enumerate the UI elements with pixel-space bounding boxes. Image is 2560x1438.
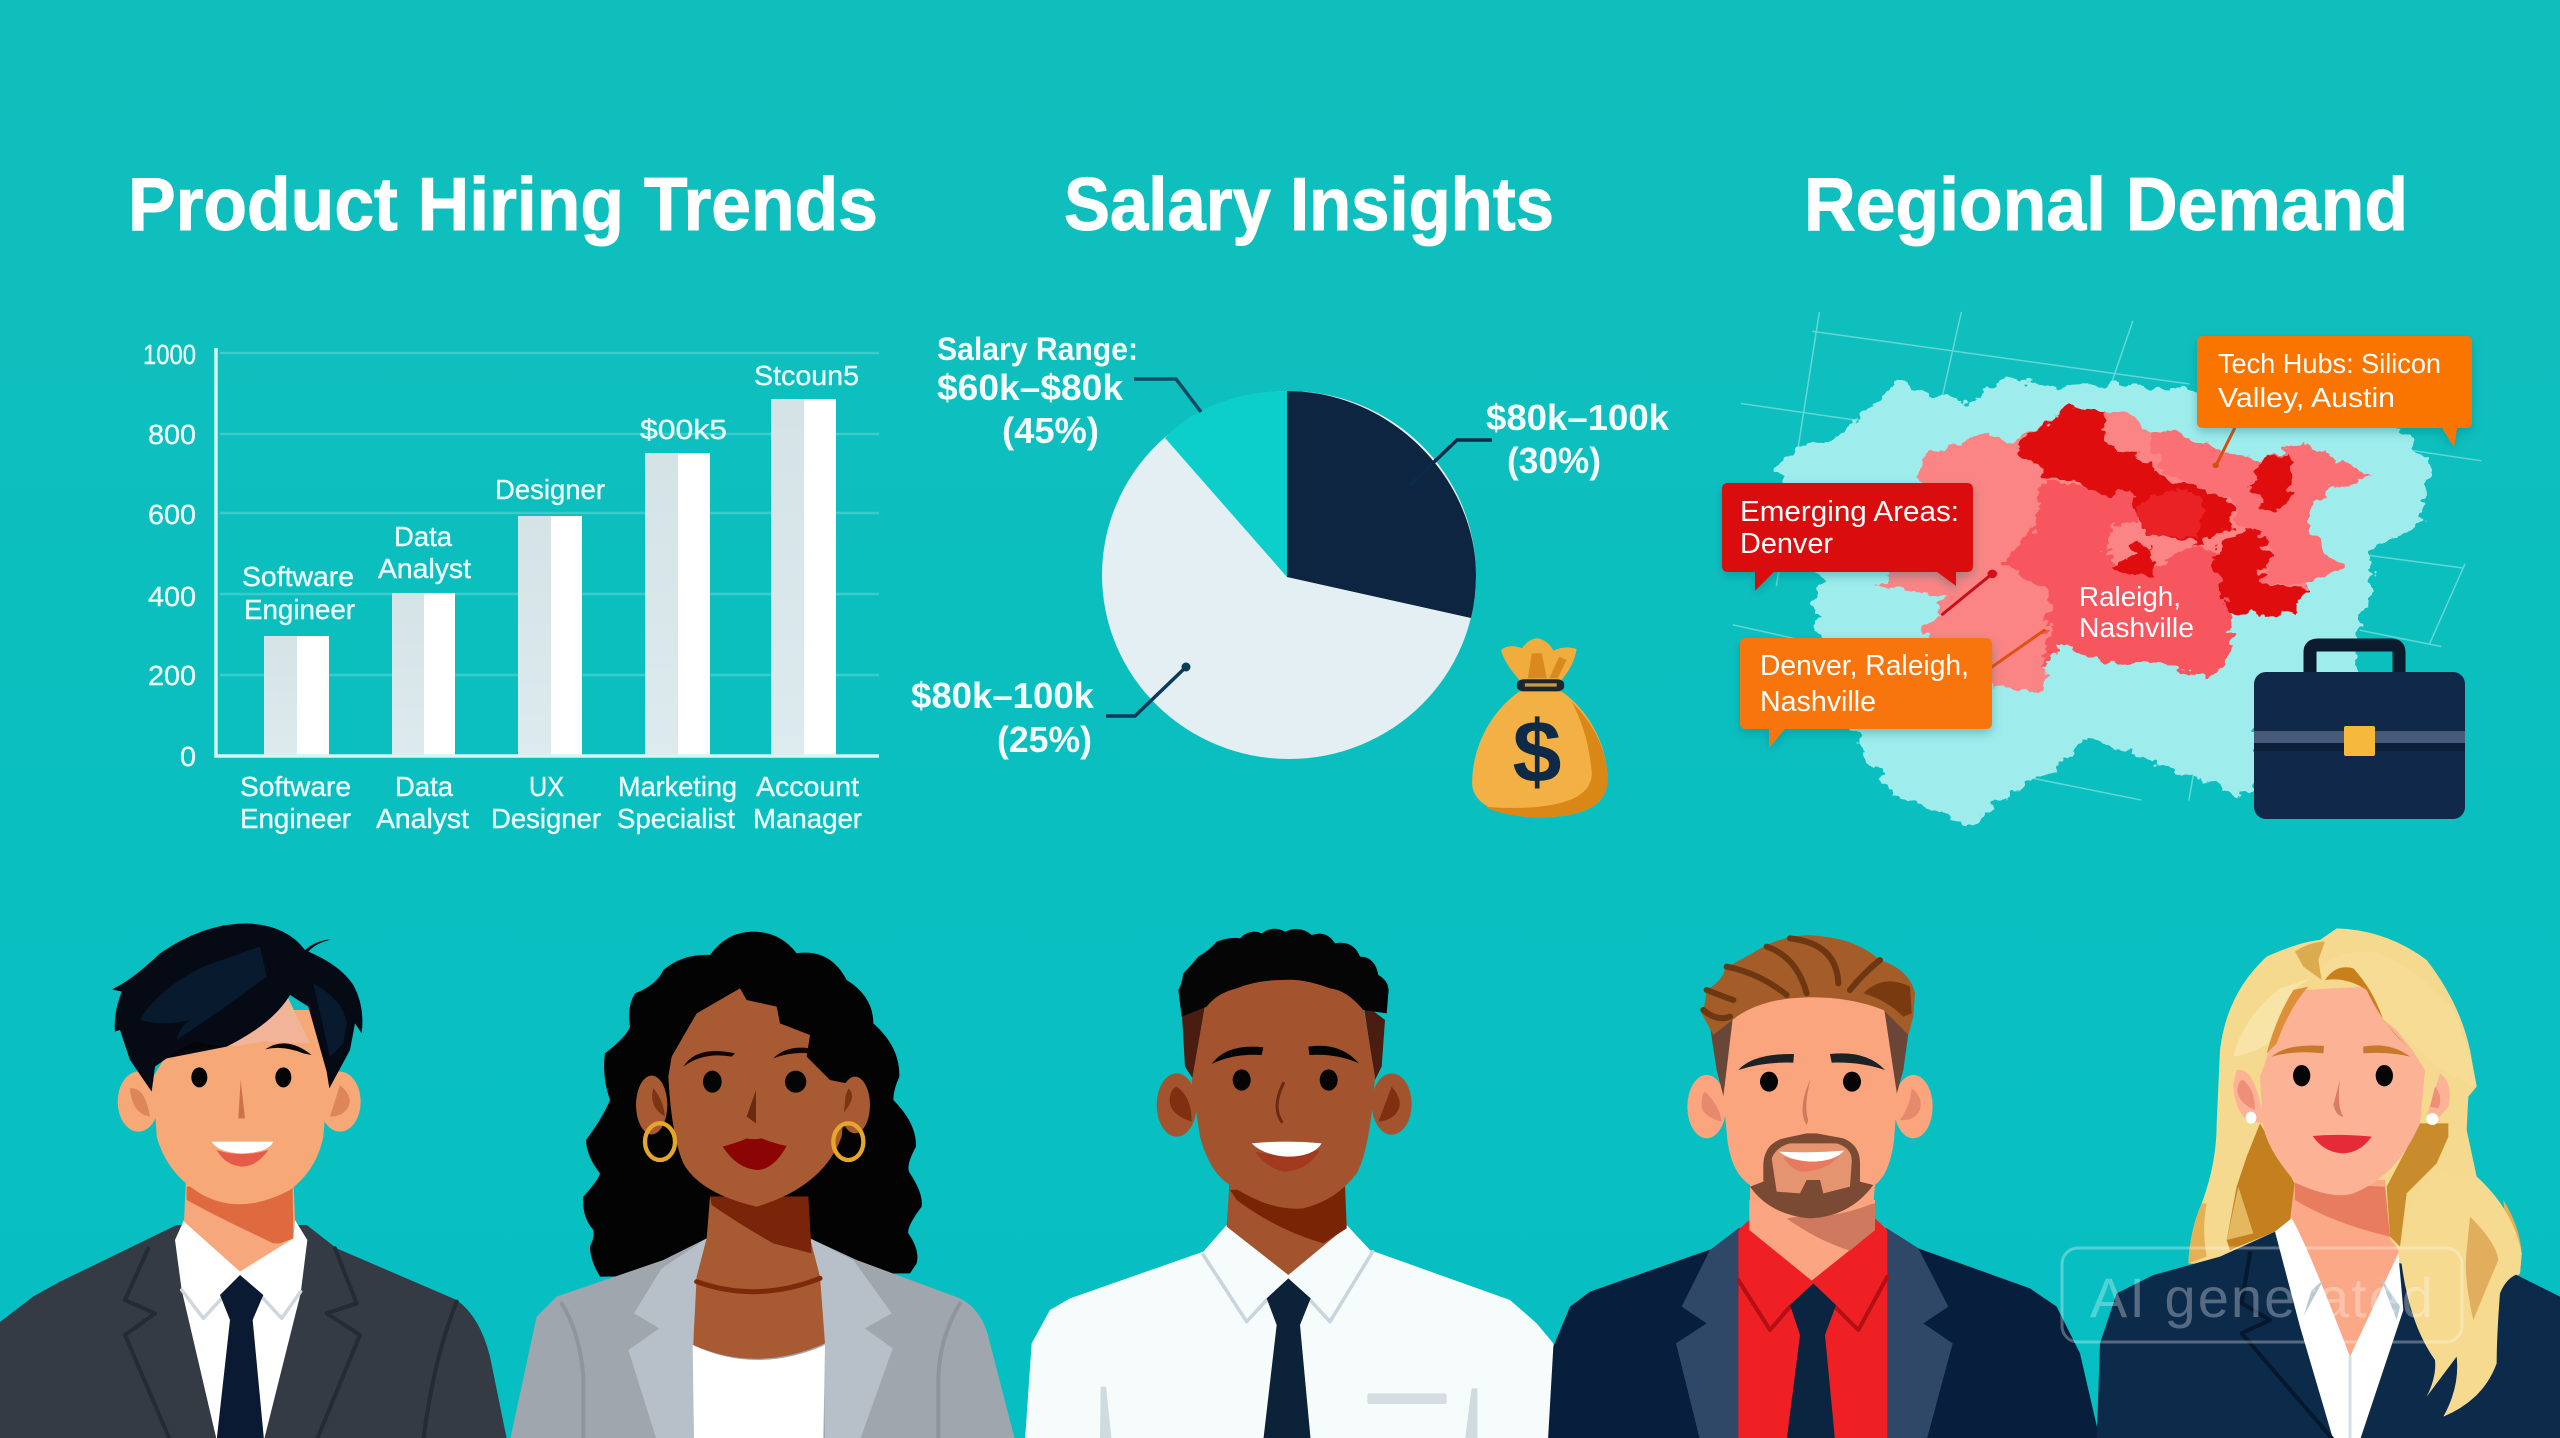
hair <box>112 923 362 1092</box>
y axis labels <box>143 339 196 772</box>
x axis labels: Analyst <box>376 803 469 834</box>
lapels <box>125 1248 457 1438</box>
brows <box>1738 1053 1885 1070</box>
ears <box>1157 1073 1412 1137</box>
eyes <box>1760 1072 1778 1092</box>
neck <box>184 1177 295 1272</box>
brows <box>1212 1046 1359 1064</box>
ears <box>1687 1075 1933 1138</box>
y axis labels: 600 <box>148 499 196 530</box>
person 2: woman in grey blazer <box>510 932 1015 1438</box>
nose <box>2333 1080 2343 1117</box>
map landmass <box>1776 377 2433 829</box>
person 5: blonde woman in navy blazer <box>2097 928 2560 1438</box>
y axis labels: 1000 <box>143 339 196 370</box>
top hair <box>1702 935 1915 1035</box>
pie label: Salary Range 45%: $60k–$80k <box>937 367 1124 408</box>
x axis labels: Marketing <box>618 771 737 802</box>
lips <box>2313 1135 2372 1153</box>
map: regional demand <box>1734 312 2481 829</box>
nose <box>238 1080 245 1118</box>
x axis labels: Engineer <box>240 803 351 834</box>
person 1: man in dark suit <box>0 923 507 1438</box>
pie label: 80k-100k 25%: $80k–100k <box>911 675 1095 716</box>
callout: Emerging Areas: Denver <box>1740 528 1833 560</box>
eyes <box>703 1071 722 1093</box>
callout: Denver, Raleigh, Nashville <box>1740 638 1992 748</box>
eyes <box>2293 1065 2310 1086</box>
long hair front <box>2400 1170 2522 1417</box>
mouth <box>1255 1150 1320 1172</box>
pie label: 80k-100k 30%: (30%) <box>1507 440 1601 481</box>
icon: money bag <box>1472 638 1607 817</box>
pie label: Salary Range 45%: Salary Range: <box>937 331 1138 367</box>
sideburns <box>1182 1003 1385 1083</box>
map label: Raleigh, Nashville: Nashville <box>2079 612 2194 643</box>
x axis labels: Data <box>395 771 453 802</box>
lapels <box>628 1238 893 1438</box>
callout: Denver, Raleigh, Nashville: Denver, Raleigh, <box>1760 650 1969 682</box>
hair <box>583 932 922 1277</box>
back hair <box>2188 928 2522 1287</box>
blazer <box>510 1238 1015 1438</box>
callout: Tech Hubs: Valley, Austin <box>2218 382 2395 413</box>
pie slice: navy <box>1287 391 1476 618</box>
person 4: bearded man with red shirt <box>1548 935 2100 1438</box>
watermark: AI generated <box>2062 1248 2462 1342</box>
x axis labels: Manager <box>753 803 862 834</box>
bar value labels: Engineer <box>244 594 355 625</box>
pie chart: salary insights <box>1102 379 1492 759</box>
brows <box>167 1042 312 1058</box>
map label: Raleigh, Nashville: Raleigh, <box>2079 581 2181 612</box>
watermark: AI generated: AI generated <box>2090 1266 2433 1329</box>
callout pointers <box>1942 429 2234 668</box>
title: Regional Demand: Regional Demand <box>1804 162 2408 246</box>
shirt <box>1738 1218 1887 1438</box>
lapels <box>1676 1228 1953 1438</box>
face <box>668 988 847 1207</box>
callout: Denver, Raleigh, Nashville: Nashville <box>1760 686 1876 718</box>
ears <box>636 1076 870 1134</box>
bar value labels: Stcoun5 <box>754 360 859 391</box>
tie <box>217 1275 264 1438</box>
pie label: 80k-100k 25%: (25%) <box>997 719 1092 760</box>
face <box>153 1010 328 1204</box>
callout: Tech Hubs: Tech Hubs: Silicon <box>2218 348 2441 379</box>
title: Product Hiring Trends: Product Hiring Trends <box>128 162 878 246</box>
inner hair shadows <box>2227 1123 2297 1250</box>
pie label: Salary Range 45% <box>937 331 1138 451</box>
map label: Raleigh, Nashville <box>2079 581 2194 643</box>
person 3: man in white shirt <box>1025 929 1560 1438</box>
top <box>693 1345 825 1438</box>
bar: UX Designer <box>518 516 582 755</box>
earrings <box>645 1123 675 1160</box>
y axis labels: 0 <box>180 741 196 772</box>
map heat regions <box>1878 407 2371 693</box>
x axis labels <box>240 771 862 834</box>
y axis labels: 800 <box>148 419 196 450</box>
callout: Emerging Areas: Emerging Areas: <box>1740 496 1959 528</box>
bar: Software Engineer <box>264 636 329 755</box>
bar value labels: Data <box>394 521 452 552</box>
beard <box>1750 1133 1873 1218</box>
pie label: 80k-100k 30% <box>1486 397 1670 481</box>
shirt <box>1025 1225 1560 1438</box>
bar chart: product hiring trends <box>143 339 879 834</box>
x axis labels: Designer <box>491 803 601 834</box>
neck <box>1227 1183 1347 1275</box>
dollar sign: $ <box>1513 702 1561 801</box>
shirt <box>175 1220 307 1438</box>
hair <box>1178 929 1389 1017</box>
blazer <box>2097 1232 2560 1438</box>
y axis labels: 200 <box>148 660 196 691</box>
pie slice: pale <box>1102 391 1476 759</box>
x axis labels: Account <box>756 771 859 802</box>
leader lines <box>1106 379 1492 716</box>
brows <box>2272 1045 2410 1057</box>
bar: Marketing Specialist <box>645 453 710 755</box>
callout: Tech Hubs <box>2197 336 2472 447</box>
face <box>1192 973 1375 1209</box>
shirt <box>2275 1218 2403 1438</box>
face <box>1723 987 1897 1217</box>
pie label: 80k-100k 30%: $80k–100k <box>1486 397 1670 438</box>
ears <box>118 1072 361 1132</box>
eyes <box>1233 1069 1251 1091</box>
chart axes <box>216 348 879 756</box>
pie label: 80k-100k 25% <box>911 675 1095 760</box>
tie <box>1787 1283 1836 1438</box>
bar value labels: $00k5 <box>640 414 727 445</box>
bar value labels: Analyst <box>378 553 471 584</box>
ears <box>2233 1070 2450 1123</box>
collar lines <box>1738 1277 1887 1330</box>
nose <box>1277 1083 1283 1122</box>
pie label: Salary Range 45%: (45%) <box>1002 410 1099 451</box>
bar value labels: Designer <box>495 474 605 505</box>
pie slice: teal <box>1165 391 1287 577</box>
x axis labels: Specialist <box>617 803 735 834</box>
fringe <box>2295 942 2325 980</box>
map grid lines <box>1734 312 2481 800</box>
x axis labels: Software <box>240 771 351 802</box>
bar: Account Manager <box>771 399 836 755</box>
eyes <box>191 1067 207 1087</box>
bar: Data Analyst <box>392 593 455 755</box>
lips <box>723 1138 787 1170</box>
collar lines <box>1203 1252 1373 1322</box>
necklace <box>697 1278 820 1292</box>
brows <box>683 1048 810 1067</box>
pocket <box>1367 1393 1447 1404</box>
mouth <box>1783 1155 1840 1172</box>
lapel line <box>2242 1253 2333 1438</box>
face <box>2260 987 2425 1195</box>
earrings <box>2246 1112 2256 1124</box>
tie <box>1263 1278 1311 1438</box>
callout: Emerging Areas <box>1722 483 1973 591</box>
icon: briefcase <box>2254 645 2465 819</box>
bar value labels: Software <box>242 561 354 592</box>
jacket <box>0 1225 507 1438</box>
neck <box>2290 1180 2398 1357</box>
jacket <box>1548 1228 2100 1438</box>
title: Salary Insights: Salary Insights <box>1064 162 1554 246</box>
y axis labels: 400 <box>148 581 196 612</box>
mouth <box>217 1150 268 1167</box>
nose <box>1802 1078 1811 1125</box>
collar shading <box>182 1290 301 1318</box>
chest and neck <box>693 1197 825 1359</box>
nose <box>747 1090 756 1123</box>
bar value labels <box>242 360 859 625</box>
neck <box>1749 1200 1875 1281</box>
side hair <box>1710 1007 1909 1098</box>
x axis labels: UX <box>529 771 564 802</box>
